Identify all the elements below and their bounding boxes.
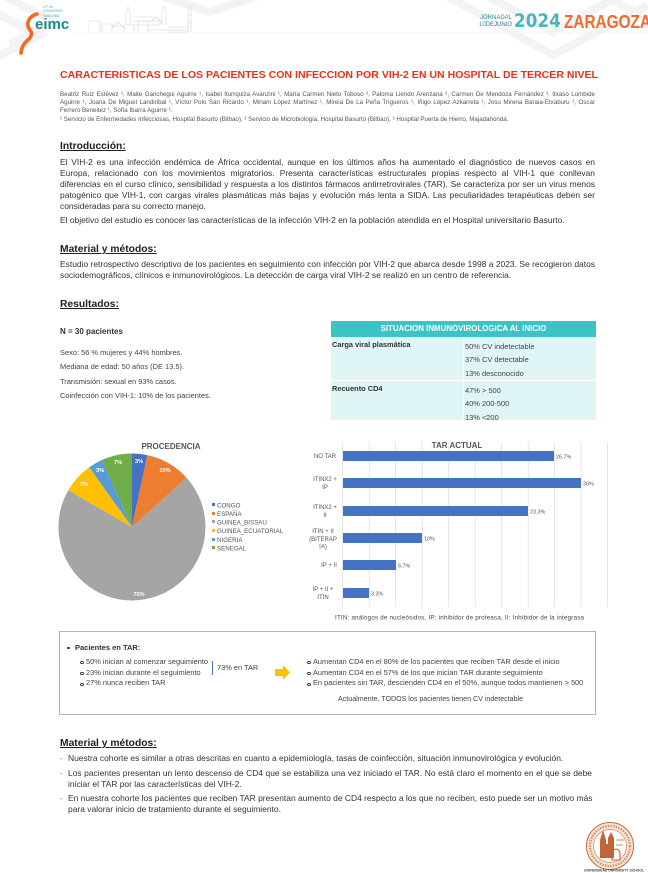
logo: university seal: [584, 822, 644, 872]
logo small text: 27ª ed.: [43, 5, 54, 9]
title: CARACTERISTICAS DE LOS PACIENTES CON INFECCION POR VIH-2 EN UN HOSPITAL DE TERCER NIVEL: [60, 69, 598, 81]
authors: Aguirre ¹, Joana De Miguel Landiribal ¹, Víctor Polo San Ricardo ¹, Miriam López Martínez ¹, Mireia De La Peña Trigueros ¹, Iñigo López Azkarreta ¹, Josu Mirena Baraia-Etxaburu ¹, Oscar: [60, 98, 595, 106]
pie percentages: 7%: [114, 460, 122, 466]
bar values: 26.7%: [556, 454, 571, 460]
logo wordmark: eimc: [35, 16, 69, 33]
text: resultados summary: Coinfección con VIH-1: 10% de los pacientes.: [60, 391, 211, 400]
values: carga viral: 50% CV indetectable: [465, 342, 534, 351]
pie legend: ESPAÑA: [217, 511, 243, 518]
logo small text: [43, 5, 63, 18]
values: carga viral: 13% desconocido: [465, 369, 524, 378]
pie legend: [212, 502, 284, 552]
event year: 2024: [514, 11, 561, 32]
left list: 27% nunca reciben TAR: [86, 678, 165, 687]
heading: resultados: Resultados:: [60, 299, 119, 310]
heading: material y métodos: Material y métodos:: [60, 244, 157, 255]
category labels: II: [323, 513, 327, 519]
category labels: ITIN + II: [312, 529, 334, 535]
logo small text: CONGRESO: [43, 9, 63, 13]
text: resultados summary: Mediana de edad: 50 años (DE 13.5).: [60, 362, 184, 371]
values: recuento CD4: 40% 200-500: [465, 399, 509, 408]
row: recuento CD4: Recuento CD4: [332, 384, 383, 393]
values: carga viral: [465, 342, 534, 378]
event label: jornadas: JORNADAL: [480, 15, 512, 21]
text: introducción: El objetivo del estudio es conocer las características de la infección VIH-2 en la población atendida en el Hospital universitario Basurto.: [60, 215, 565, 225]
text: introducción: diferencias en el curso clínico, sensibilidad y respuesta a los distintos fármacos antirretrovirales (TAR). Se caracteriza por ser un virus menos: [60, 179, 595, 189]
header background chevrons: [0, 0, 648, 60]
pie percentages: 3%: [96, 468, 104, 474]
chart title: TAR ACTUAL: [432, 441, 482, 450]
text: resultados summary: Transmisión: sexual en 93% casos.: [60, 377, 177, 386]
bracket line: [212, 661, 213, 675]
text: resultados summary: N = 30 pacientes: [60, 327, 123, 336]
text: introducción: consideradas para su correcto manejo.: [60, 201, 206, 211]
authors: ¹ Servicio de Enfermedades Infecciosas, Hospital Basurto (Bilbao), ² Servicio de Microbiología, Hospital Basurto (Bilbao), ³ Hospital Puerta de Hierro, Majadahonda.: [60, 116, 508, 122]
pie chart: procedencia: [58, 442, 284, 600]
chart footnote: ITIN: análogos de nucleósidos, IP: inhibidor de proteasa, II: Inhibidor de la integrasa: [335, 614, 585, 622]
pie legend: GUINEA_ECUATORIAL: [217, 528, 284, 535]
event label: jornadas: 10DEJUNIO: [479, 22, 512, 28]
event label: jornadas: [479, 14, 512, 28]
bars: [343, 451, 581, 598]
panel: situación inmunovirológica table: [331, 321, 596, 420]
values: recuento CD4: [465, 386, 509, 422]
category labels: IP + II +: [313, 587, 334, 593]
text: introducción: patogénico que VIH-1, con cargas virales plasmáticas más bajas y evolución más lenta a SIDA. Las peculiaridades terapéuticas deben ser: [60, 190, 595, 200]
category labels: [309, 454, 337, 601]
pie percentages: 10%: [159, 468, 171, 474]
authors: Ferrero Beneitez ¹, Sofía Ibarra Aguirre ¹.: [60, 106, 172, 114]
pie title: PROCEDENCIA: [141, 442, 201, 451]
left list: 50% inician al comenzar seguimiento: [86, 656, 208, 666]
values: carga viral: 37% CV detectable: [465, 355, 529, 364]
bar values: 3.3%: [371, 592, 383, 598]
arrow: yellow: [275, 665, 290, 680]
text: CV indetectable: Actualmente, TODOS los pacientes tienen CV indetectable: [338, 694, 523, 702]
bar values: 6.7%: [398, 564, 410, 570]
right list: Aumentan CD4 en el 57% de los que inician TAR durante seguimiento: [313, 668, 543, 676]
left list: 23% inician durante el seguimiento: [86, 668, 201, 676]
pie slice: España: [132, 455, 187, 527]
category labels: IP + II: [321, 563, 337, 569]
pie percentages: 3%: [135, 459, 143, 465]
bar chart: TAR actual: [309, 441, 608, 622]
pie slice: Congo: [132, 453, 147, 527]
list: conclusiones: En nuestra cohorte los pacientes que reciben TAR presentan aumento de CD4 respecto a los que no reciben, esto puede ser un motivo más: [68, 792, 593, 802]
left list: [80, 656, 208, 687]
pie slice: Nigeria: [89, 460, 132, 527]
list: conclusiones: para valorar inicio de tratamiento durante el seguimiento.: [68, 804, 281, 814]
pie slice: Guinea Ecuatorial: [68, 467, 132, 527]
list: conclusiones: -: [60, 768, 63, 778]
pie legend: GUINEA_BISSAU: [217, 520, 267, 526]
category labels: IP: [322, 485, 328, 491]
bullet: [67, 646, 70, 649]
right list: [307, 656, 583, 687]
pie legend: NIGERIA: [217, 537, 243, 544]
text: 73% en TAR: 73% en TAR: [217, 662, 258, 672]
row: carga viral: Carga viral plasmática: [332, 340, 410, 349]
pie percentages: 7%: [80, 482, 88, 488]
category labels: ITIN: [317, 595, 329, 601]
pie slice: Guinea Bissau: [58, 478, 205, 600]
pie legend: SENEGAL: [217, 546, 247, 552]
pie legend: CONGO: [217, 502, 241, 510]
seal caption: UNIVERSIDAD UNIVERSITY SCHOOL: [584, 868, 644, 872]
category labels: ITINX2 +: [313, 505, 337, 511]
icon: orange swoosh: [19, 12, 39, 55]
authors: Beatriz Ruiz Estévez ¹, Maite Ganchegui Aguirre ¹, Isabel Iturrquiza Avanzini ¹, María Carmen Nieto Toboso ², Paloma Liendo Arenzana ², Carmen De Mendoza Fernández ³, Itxaso Lombide: [60, 90, 595, 98]
authors: [60, 90, 595, 122]
text: introducción: El VIH-2 es una infección endémica de África occidental, aunque en los últimos años ha aumentado el diagnóstico de nuevos casos en: [60, 157, 595, 167]
logo small text: NACIONAL: [43, 14, 60, 18]
callout: pacientes en TAR: [59, 631, 596, 715]
bar values: [371, 454, 594, 598]
bar values: 10%: [424, 536, 435, 542]
list: conclusiones: Los pacientes presentan un lento descenso de CD4 que se estabiliza una vez iniciado el TAR. No está claro el momento en el que se debe: [68, 768, 592, 778]
text: material y métodos: [60, 259, 595, 280]
text: resultados summary: [60, 327, 211, 400]
pie percentages: [80, 459, 171, 598]
callout heading: Pacientes en TAR:: [75, 642, 140, 652]
illustration: cathedral sketch: [88, 5, 192, 32]
table header: [331, 321, 596, 337]
values: recuento CD4: 47% > 500: [465, 386, 501, 395]
list: conclusiones: -: [60, 753, 63, 763]
text: introducción: Europa, relacionado con los movimientos migratorios. Presenta características estructurales propias respecto al VIH-1 que conllevan: [60, 168, 595, 178]
table header: SITUACION INMUNOVIROLOGICA AL INICIO: [381, 324, 546, 333]
bar values: 23.3%: [530, 510, 545, 516]
category labels: IA): [319, 544, 327, 550]
text: resultados summary: Sexo: 56 % mujeres y 44% hombres.: [60, 348, 182, 357]
category labels: (BITERAP: [309, 537, 337, 543]
right list: Aumentan CD4 en el 80% de los pacientes que reciben TAR desde el inicio: [313, 656, 560, 666]
values: recuento CD4: 13% <200: [465, 413, 499, 422]
list: conclusiones: -: [60, 792, 63, 802]
right list: En pacientes sin TAR, descienden CD4 en el 50%, aunque todos mantienen > 500: [313, 678, 583, 687]
heading: introducción: Introducción:: [60, 141, 126, 152]
text: material y métodos: Estudio retrospectivo descriptivo de los pacientes en seguimiento con infección por VIH-2 que abarca desde 1998 a 2023. Se recogieron datos: [60, 259, 595, 269]
bar values: 30%: [583, 482, 594, 488]
heading: conclusiones: Material y métodos:: [60, 738, 157, 749]
text: material y métodos: sociodemográficos, clínicos e inmunovirológicos. La detección de carga viral VIH-2 se realizó en un centro de referencia.: [60, 270, 511, 280]
pie slice: Senegal: [102, 454, 132, 527]
list: conclusiones: iniciar el TAR por las características del VIH-2.: [68, 778, 242, 788]
list: conclusiones: [60, 753, 593, 814]
category labels: NO TAR: [314, 454, 337, 460]
pie percentages: 70%: [133, 592, 145, 598]
logo: SEIMC: [19, 5, 69, 55]
category labels: ITINX2 +: [313, 477, 337, 483]
list: conclusiones: Nuestra cohorte es similar a otras descritas en cuanto a epidemiología, tasas de coinfección, situación inmunovirológica y evolución.: [68, 753, 563, 763]
text: introducción: [60, 157, 595, 225]
